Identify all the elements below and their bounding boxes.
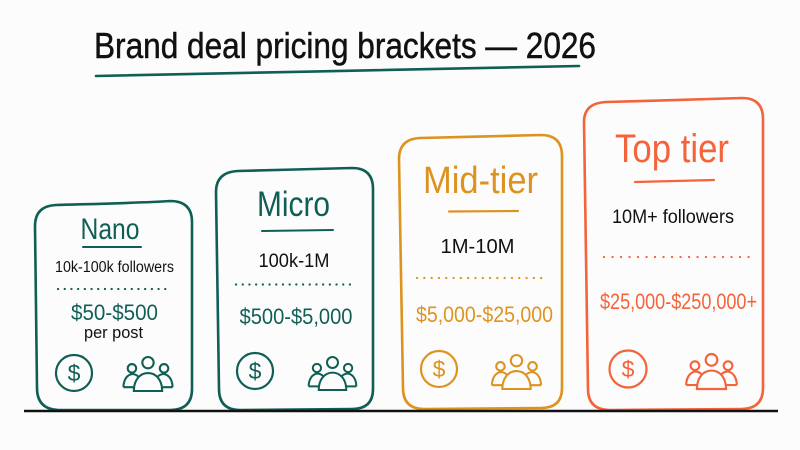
panel: Mid-tier xyxy=(399,135,562,409)
title: Brand deal pricing brackets — 2026 xyxy=(94,25,596,66)
price: Top tier: $25,000-$250,000+ xyxy=(600,289,757,314)
icon: dollar coin xyxy=(421,351,457,387)
heading: Nano: Nano xyxy=(80,213,140,246)
icon: dollar coin xyxy=(610,350,646,388)
price: Micro: $500-$5,000 xyxy=(240,304,352,329)
baseline xyxy=(24,410,778,412)
icon: dollar coin xyxy=(237,353,273,389)
icon: dollar coin: $ xyxy=(68,360,81,386)
icon: dollar coin: $ xyxy=(433,356,446,382)
icon: dollar coin: $ xyxy=(622,356,635,382)
panel: Nano xyxy=(35,201,192,410)
price: Mid-tier: $5,000-$25,000 xyxy=(416,302,553,327)
heading: Top tier: Top tier xyxy=(615,127,729,171)
price: Nano: $50-$500 xyxy=(71,300,158,325)
panel: Micro xyxy=(216,168,373,410)
icon: dollar coin: $ xyxy=(249,358,262,384)
followers: Top tier: 10M+ followers xyxy=(612,207,734,228)
icon: people xyxy=(686,354,737,389)
followers: Mid-tier: 1M-10M xyxy=(440,236,514,258)
heading: Mid-tier: Mid-tier xyxy=(423,160,538,202)
icon: people xyxy=(492,355,541,389)
followers: Nano: 10k-100k followers xyxy=(55,259,174,276)
icon: dollar coin xyxy=(56,355,92,391)
icon: people xyxy=(309,357,356,390)
note: per post: per post xyxy=(84,324,143,342)
heading: Micro: Micro xyxy=(257,185,330,224)
panel: Top tier xyxy=(584,98,763,410)
followers: Micro: 100k-1M xyxy=(258,251,330,272)
icon: people xyxy=(123,357,173,391)
